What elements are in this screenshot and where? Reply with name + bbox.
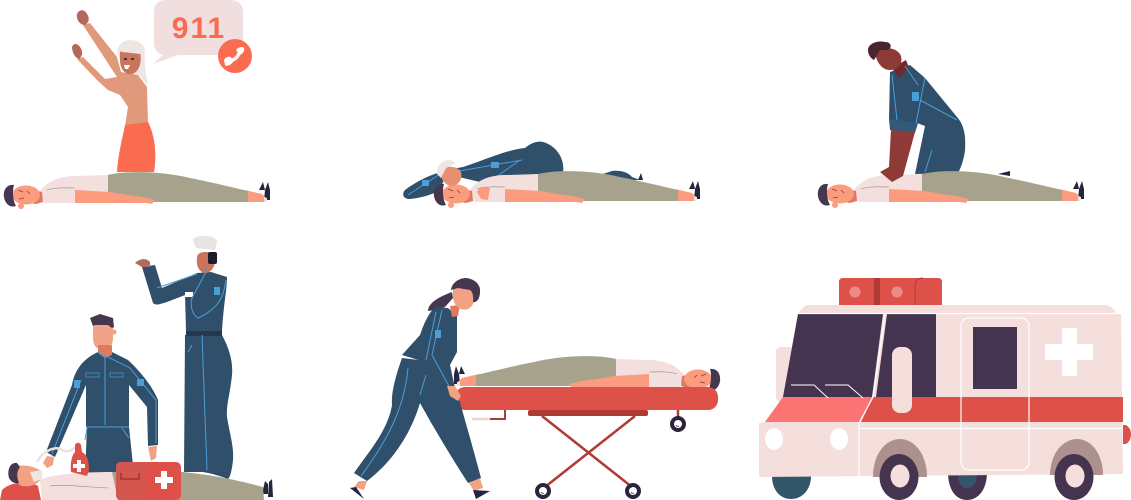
patient lying down [434,171,700,208]
icon: phone [218,39,252,73]
scene: nurse pushing stretcher [350,278,720,499]
side mirror [776,347,796,402]
medic bending over patient [403,142,643,199]
speech bubble [153,0,243,64]
scene: woman calling 911 over patient [4,0,270,209]
windshield [783,314,883,397]
wipers [791,385,863,398]
stretcher mattress [455,387,718,410]
scene: medics with first aid kit [0,236,273,500]
scene: medic giving chest compressions [818,41,1084,208]
medic arms and hands on chest [880,130,915,182]
wheels behind body [772,472,987,500]
headlights [765,428,848,450]
hood [765,397,872,422]
stretcher frame [472,410,678,487]
medic [868,41,1010,176]
woman [72,10,155,172]
nurse [350,278,490,499]
side window [876,314,936,397]
medic head and hand [437,160,490,200]
body seams and door outline [798,314,1121,477]
icon: white cross [1045,328,1093,376]
patient with oxygen mask [0,463,273,500]
stretcher wheels [537,418,684,497]
icon: oxygen tank with tube [37,443,89,476]
scene: ambulance [759,278,1131,500]
roof siren box [839,278,942,305]
rear wheel arch and wheel [1050,439,1103,500]
tall medic on phone [135,236,233,479]
patient on stretcher [454,356,720,393]
door window [973,327,1017,389]
patient lying down [818,171,1084,208]
door handle [892,347,912,413]
red stripe [861,397,1123,422]
front wheel arch and wheel [873,439,927,500]
kneeling medic [43,314,158,476]
patient lying down [4,172,270,209]
icon: first aid kit [116,462,181,500]
scene: medic checking breathing [403,142,700,208]
tail light [1123,425,1131,444]
text: 911: 911 [172,12,226,45]
ambulance body [759,305,1123,477]
